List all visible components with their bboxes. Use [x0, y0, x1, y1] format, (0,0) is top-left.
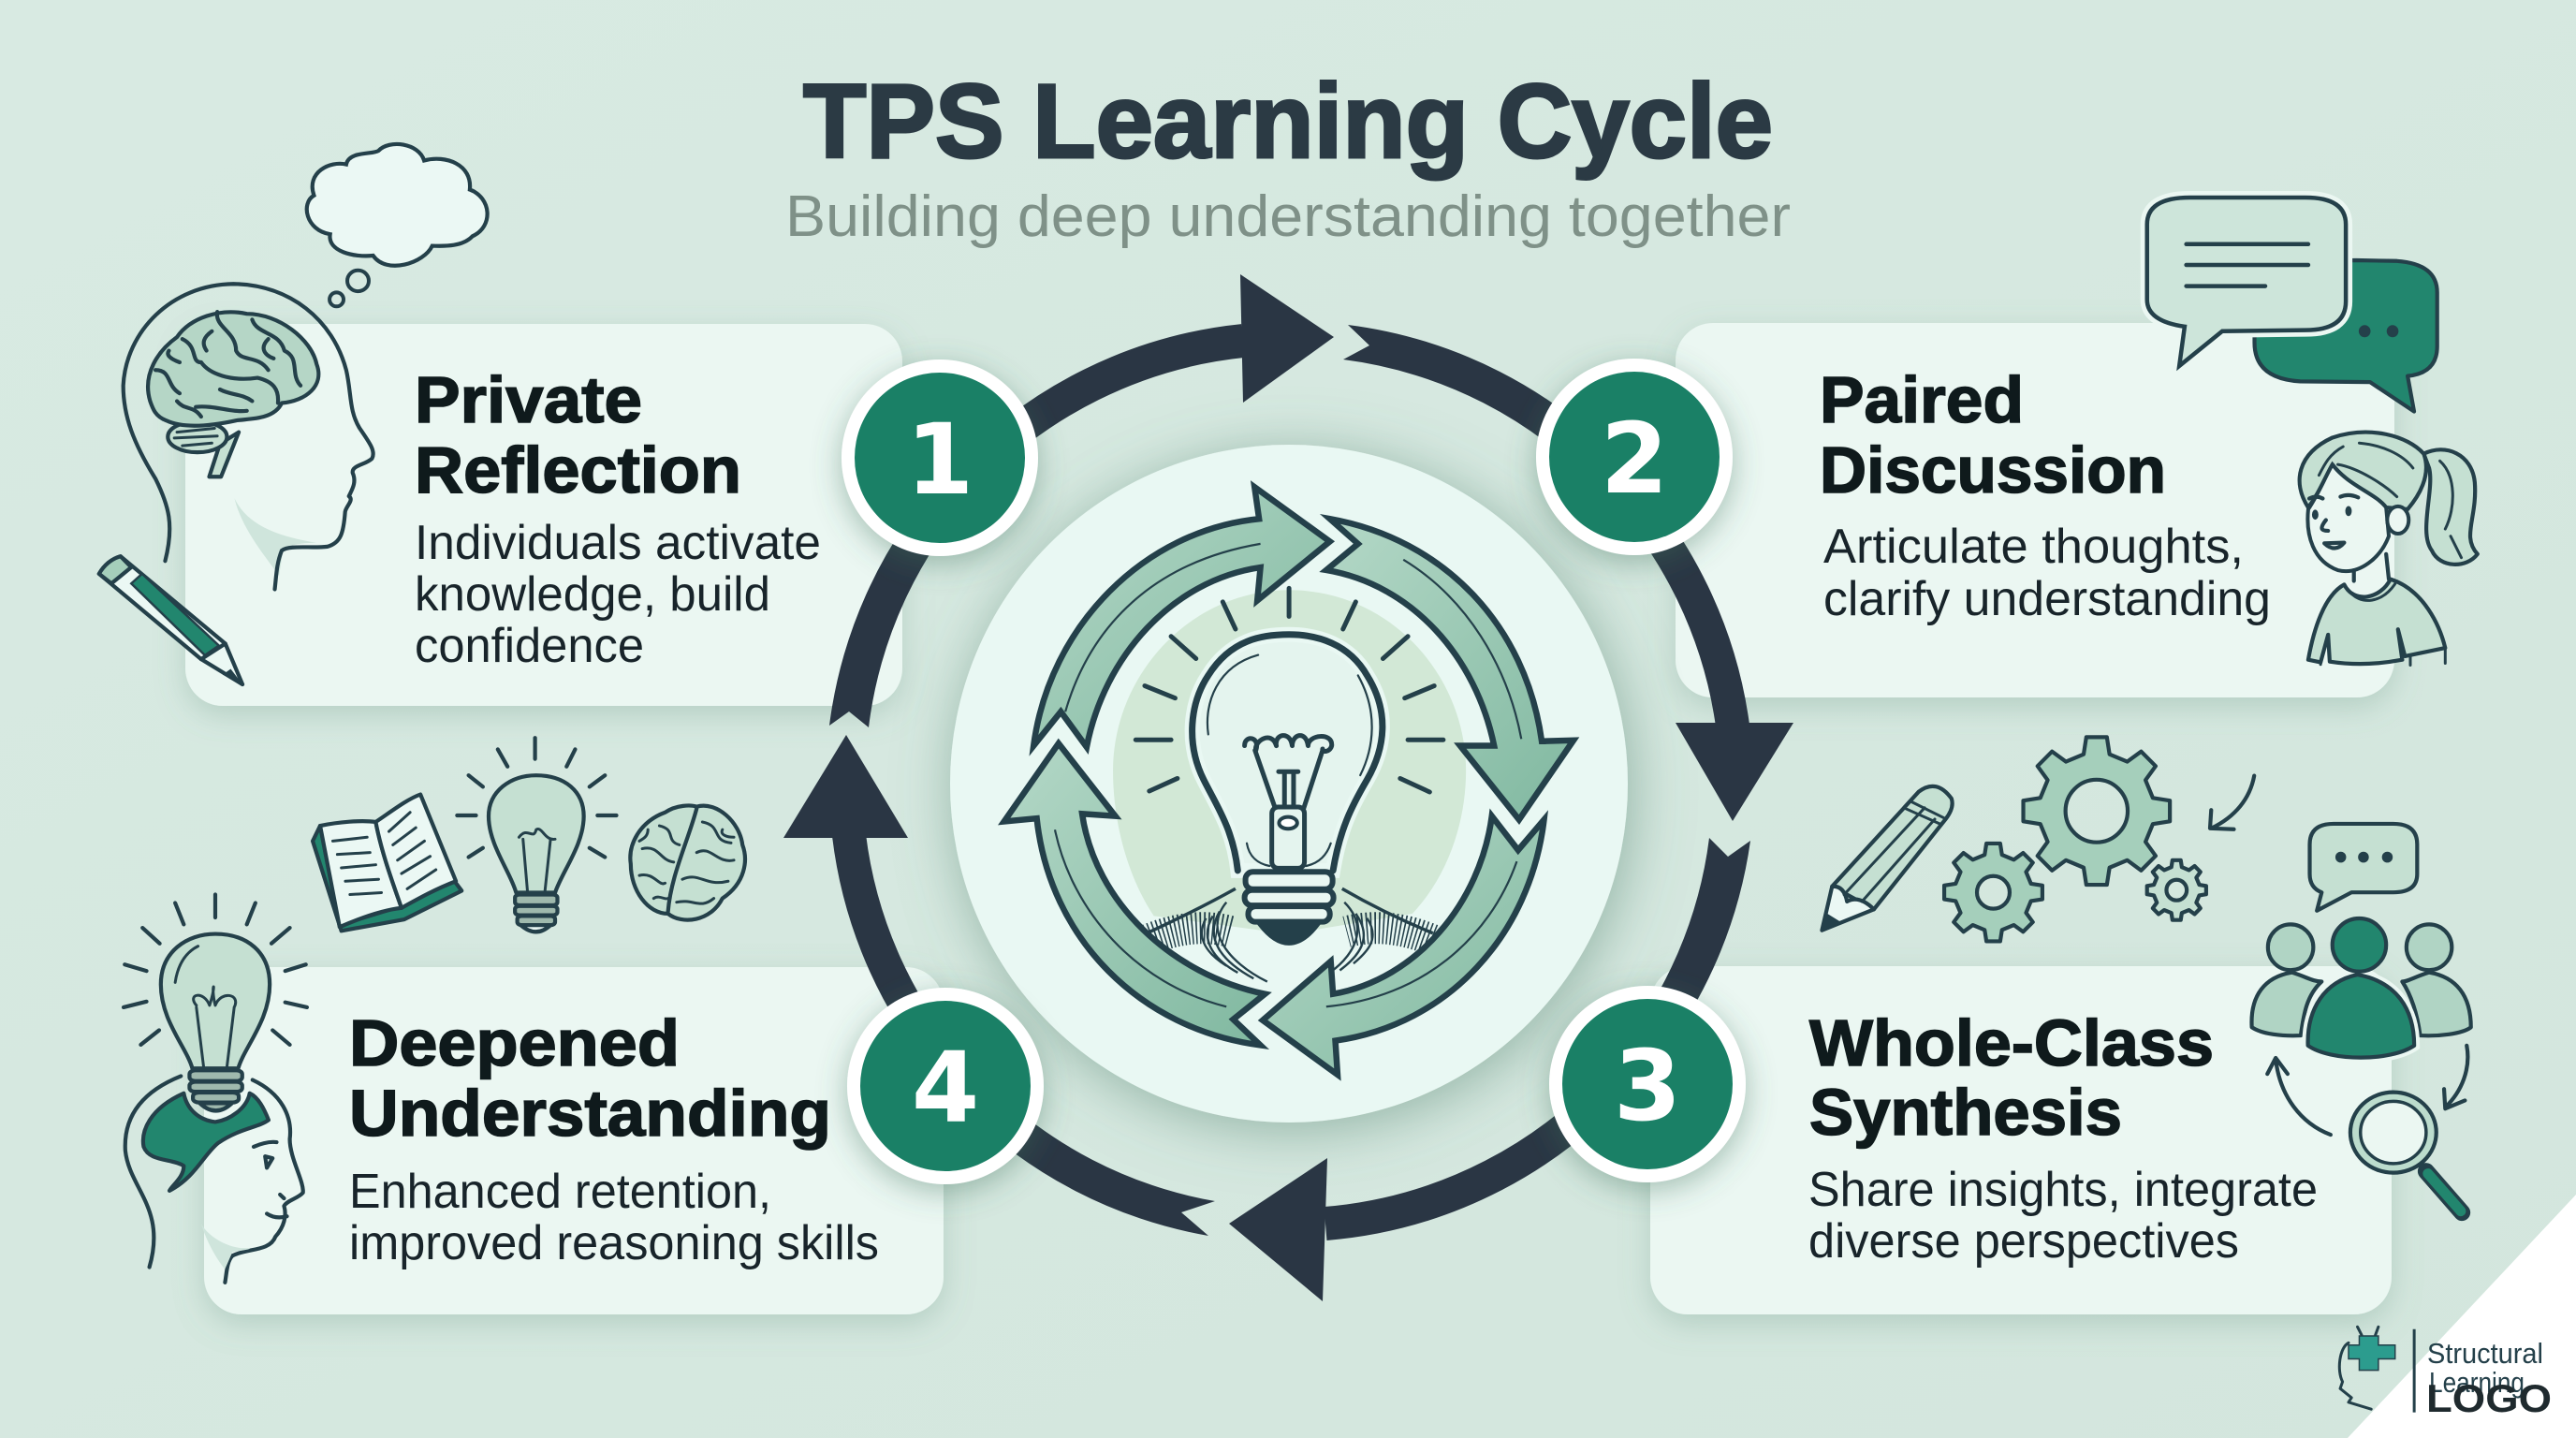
text: deepened understanding	[349, 1165, 879, 1270]
text: private reflection: knowledge, build	[415, 567, 770, 622]
text: private reflection: Individuals activate	[415, 516, 821, 570]
text: whole-class synthesis	[1808, 1163, 2318, 1269]
thought cloud	[307, 144, 488, 306]
heading: whole-class synthesis: Whole-Class	[1809, 1006, 2214, 1079]
green bubble	[2255, 260, 2437, 412]
heading: paired discussion	[1820, 363, 2166, 506]
bulb highlights	[1208, 655, 1372, 866]
heading: private reflection: Reflection	[415, 433, 741, 506]
neck shade	[234, 498, 316, 576]
cycle arrow 4	[1004, 743, 1265, 1045]
right person	[2402, 924, 2471, 1035]
brain	[148, 312, 318, 477]
title: TPS Learning Cycle	[803, 63, 1773, 180]
icon: girl with ponytail	[2300, 433, 2478, 665]
centre person	[2308, 918, 2414, 1058]
light bubble	[2147, 198, 2346, 366]
ear	[2387, 506, 2408, 534]
heading: private reflection	[415, 363, 741, 506]
glow behind bulb	[1113, 590, 1466, 934]
rays	[124, 895, 307, 1045]
heading: deepened understanding: Understanding	[349, 1077, 831, 1150]
bulb outline	[1193, 635, 1383, 871]
text: paired discussion: Articulate thoughts,	[1823, 520, 2244, 574]
shirt	[2308, 580, 2445, 664]
icon: book, bulb and brain row	[313, 738, 745, 932]
heading: deepened understanding	[349, 1006, 831, 1150]
logo text: LOGO	[2426, 1376, 2552, 1420]
arrow tail: into step 2	[1343, 325, 1627, 492]
green hair	[143, 1093, 269, 1191]
ponytail	[2423, 449, 2478, 565]
magnifier	[2350, 1093, 2462, 1212]
small bulb	[457, 738, 617, 932]
badge 1: 1	[906, 403, 973, 517]
cycle arrows	[2267, 1046, 2467, 1135]
arrow tail: into step 3	[1616, 838, 1750, 1078]
heading: whole-class synthesis: Synthesis	[1809, 1076, 2122, 1149]
icon: thought cloud and head with brain	[99, 144, 488, 684]
arrow tail: into step 1	[829, 467, 977, 727]
logo text: Structural	[2427, 1337, 2543, 1370]
icon: speech bubbles	[2147, 198, 2437, 412]
icon: central light bulb with cycle arrows	[1004, 487, 1573, 1075]
left person	[2252, 924, 2321, 1035]
face details	[254, 1142, 287, 1217]
face	[225, 1080, 303, 1283]
icon: bulb above head	[124, 895, 307, 1283]
panel: deepened understanding	[204, 967, 944, 1314]
medium gear	[1944, 844, 2042, 941]
curved arrow into gears	[2210, 776, 2254, 829]
book	[313, 795, 461, 931]
big bulb	[161, 934, 270, 1110]
bulb glass	[1193, 635, 1383, 871]
chat bubble	[2310, 824, 2417, 911]
badge 3	[1549, 986, 1746, 1182]
large gear	[2024, 737, 2170, 885]
heading: whole-class synthesis	[1809, 1006, 2214, 1149]
logo mark	[2339, 1327, 2414, 1413]
pencil	[99, 556, 242, 684]
facial features	[2309, 443, 2462, 558]
badge 4: 4	[912, 1031, 979, 1145]
heading: deepened understanding: Deepened	[349, 1006, 680, 1079]
pencil	[1822, 786, 1953, 931]
logo text	[2426, 1337, 2552, 1420]
panel: paired discussion	[1676, 323, 2394, 697]
hair	[2300, 433, 2426, 509]
neck shade	[201, 1224, 250, 1269]
heading: private reflection: Private	[415, 363, 642, 436]
text: private reflection: confidence	[415, 619, 644, 673]
badge 1	[842, 360, 1038, 556]
arrow: step 3 to 4	[1229, 1067, 1629, 1301]
brain	[630, 806, 745, 920]
outer cycle arrows	[783, 274, 1793, 1301]
icon: class group with discussion	[2252, 824, 2471, 1413]
corner white triangle	[2348, 1195, 2576, 1438]
shoulders hatch	[1140, 888, 1440, 982]
arrow: step 2 to 3	[1614, 479, 1793, 821]
text: deepened understanding: improved reasoning skills	[349, 1216, 879, 1270]
heading: paired discussion: Discussion	[1820, 433, 2166, 506]
cycle arrow 1	[1033, 487, 1330, 747]
badge 2	[1536, 359, 1733, 555]
arrow tail: into step 4	[962, 1083, 1215, 1236]
cycle arrow 3	[1263, 816, 1544, 1075]
text: whole-class synthesis: Share insights, integrate	[1808, 1163, 2318, 1217]
text: paired discussion: clarify understanding	[1823, 572, 2271, 626]
arrow: step 1 to 2	[964, 274, 1334, 479]
collar and sleeve lines	[2320, 581, 2445, 665]
text: paired discussion	[1823, 520, 2271, 626]
head outline	[124, 284, 373, 589]
badge 4	[847, 988, 1044, 1184]
neck	[2354, 554, 2389, 581]
central disc	[950, 445, 1628, 1123]
small gear	[2147, 860, 2206, 920]
face	[2307, 464, 2389, 571]
logo text: Learning	[2429, 1366, 2525, 1399]
rays	[1135, 588, 1443, 792]
arrow: step 4 to 1	[783, 735, 959, 1078]
screw base	[1245, 872, 1334, 943]
text: private reflection	[415, 516, 821, 673]
cycle arrow 2	[1326, 519, 1573, 820]
hair line	[125, 1076, 181, 1268]
subtitle: Building deep understanding together	[785, 184, 1791, 249]
icon: pencil and gears	[1822, 737, 2254, 941]
filament	[1245, 736, 1332, 868]
panel: whole-class synthesis	[1650, 966, 2392, 1314]
text: whole-class synthesis: diverse perspectives	[1808, 1214, 2239, 1269]
text: deepened understanding: Enhanced retention,	[349, 1165, 771, 1219]
badge 2: 2	[1601, 402, 1668, 516]
heading: paired discussion: Paired	[1820, 363, 2024, 436]
panel: private reflection	[185, 324, 902, 706]
badge 3: 3	[1614, 1029, 1681, 1143]
